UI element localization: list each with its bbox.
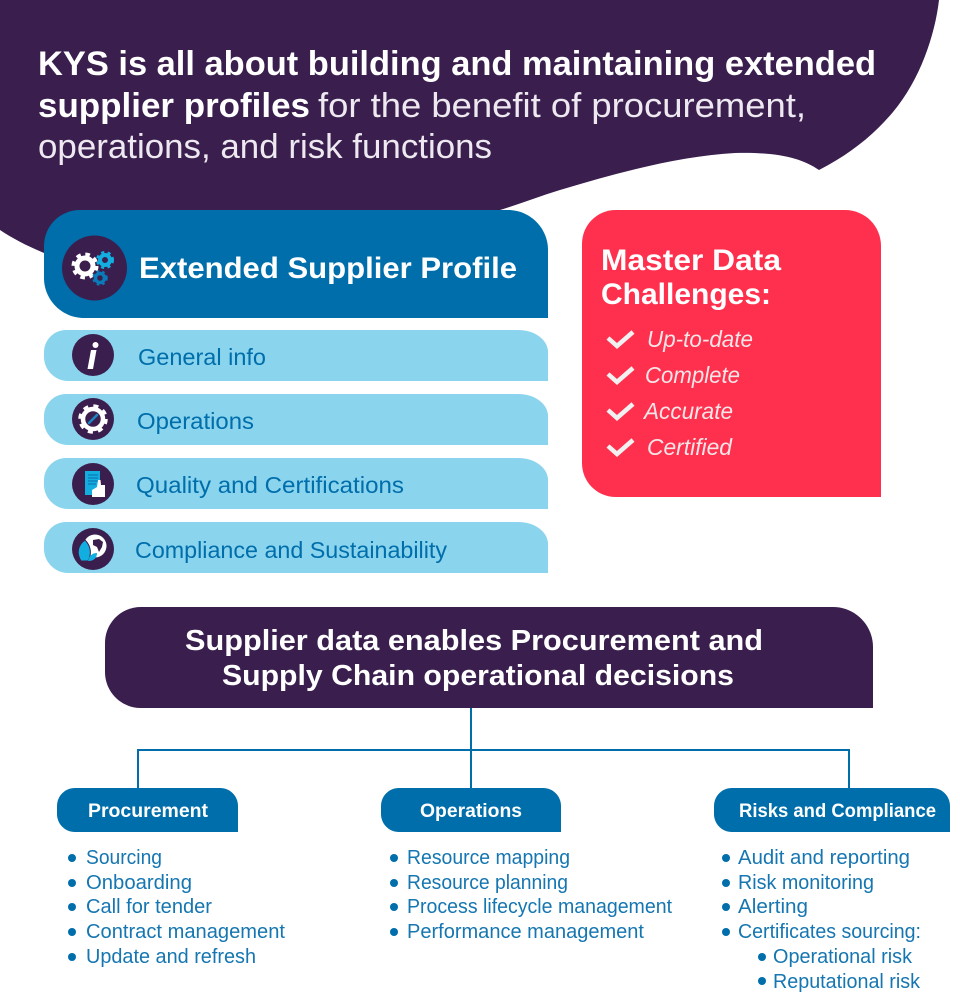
risks list: Risk monitoring [738,872,874,894]
risks list [722,847,921,993]
row: quality and certifications [44,458,548,509]
title: operations, and risk functions [38,128,492,166]
risks list: Certificates sourcing: [738,921,921,943]
icon: globe and leaf [72,528,114,570]
icon: wrench gear [72,398,114,440]
row: compliance and sustainability [44,522,548,573]
icon: gears [62,236,127,300]
procurement list: Contract management [86,921,285,943]
risks tab: Risks and Compliance [739,801,936,822]
challenges heading: Challenges: [601,278,771,311]
challenge: certified: Certified [647,434,733,460]
procurement list [68,847,285,968]
procurement tab: Procurement [88,801,209,822]
challenges heading [601,244,781,311]
header background blob [0,0,939,279]
procurement list: Sourcing [86,847,162,869]
operations list: Process lifecycle management [407,896,672,918]
challenge: accurate: Accurate [642,398,733,424]
icon: info [72,334,114,376]
panel: supplier data banner: Supplier data enables Procurement and [185,625,763,657]
row: operations: Operations [137,408,254,434]
challenges heading: Master Data [601,244,781,277]
title [38,45,876,166]
panel: extended supplier profile [44,210,548,573]
risks list: Reputational risk [773,971,921,993]
procurement list: Call for tender [86,896,212,918]
operations list: Performance management [407,921,644,943]
panel: supplier data banner [105,607,873,708]
operations tab [381,788,561,832]
profile header bar [44,210,548,318]
row: operations [44,394,548,445]
connector lines [138,708,849,788]
challenge: certified [608,434,733,460]
operations list: Resource mapping [407,847,570,869]
title: KYS is all about building and maintaining extended [38,45,876,83]
risks list: Operational risk [773,946,913,968]
row: general info: General info [138,344,266,370]
icon: document and hand [72,463,114,505]
risks list: Alerting [738,896,808,918]
procurement list: Update and refresh [86,946,256,968]
column: operations [381,788,672,943]
column: procurement [57,788,285,968]
procurement tab [57,788,238,832]
title: supplier profiles [38,87,310,125]
challenge: up-to-date: Up-to-date [647,326,753,352]
panel: supplier data banner: Supply Chain operational decisions [222,660,734,692]
row: compliance and sustainability: Compliance and Sustainability [135,537,448,563]
title: for the benefit of procurement, [318,87,806,125]
risks list: Audit and reporting [738,847,910,869]
risks tab [714,788,950,832]
column: risks and compliance [714,788,950,993]
challenge: complete: Complete [645,362,740,388]
row: general info [44,330,548,381]
profile heading: Extended Supplier Profile [139,252,517,285]
panel: master data challenges [582,210,881,497]
procurement list: Onboarding [86,872,192,894]
operations tab: Operations [420,801,522,822]
operations list [390,847,672,943]
row: quality and certifications: Quality and Certifications [136,472,404,498]
operations list: Resource planning [407,872,568,894]
